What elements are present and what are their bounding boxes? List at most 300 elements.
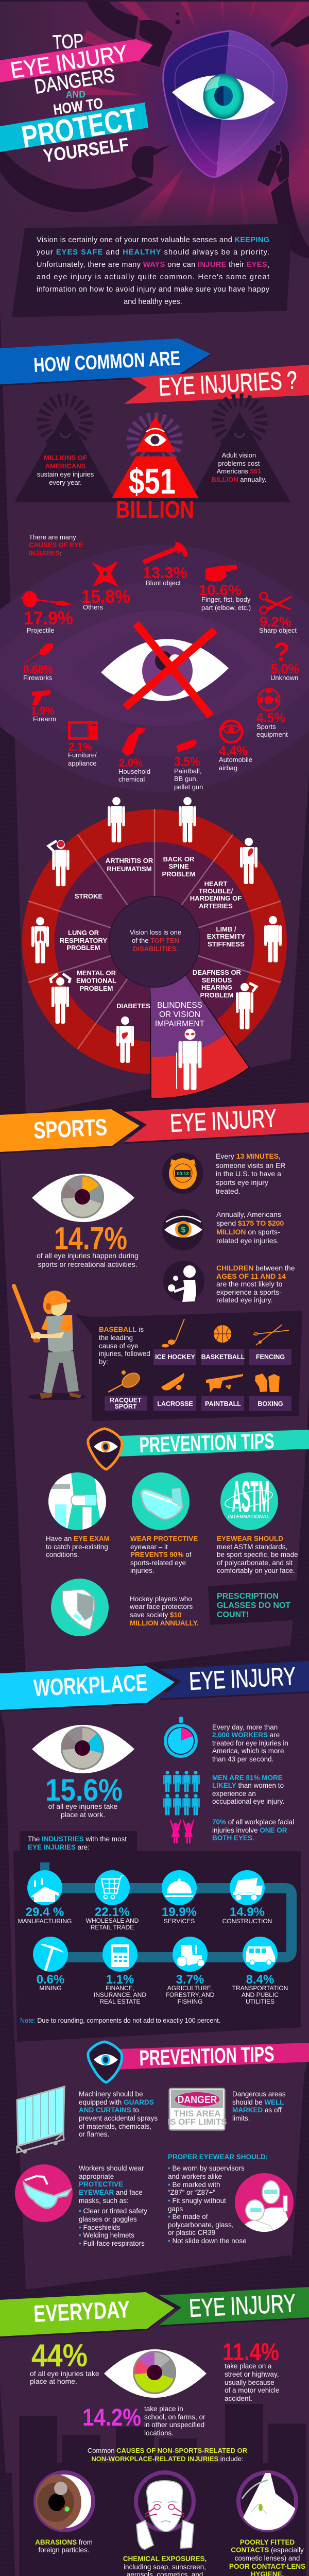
- text: adult vision: problems cost: [218, 460, 260, 467]
- icon: safety glasses: [15, 2164, 73, 2222]
- card: paintball: PAINTBALL: [205, 1400, 241, 1408]
- text: children: AGES OF 11 AND 14: [216, 1272, 286, 1280]
- panel: intro: Unfortunately, there are many WAYS one can INJURE their EYES,: [37, 261, 269, 269]
- stat: manufacturing: MANUFACTURING: [18, 1918, 72, 1925]
- icon: boy catching ball: [163, 1261, 204, 1302]
- icon: workplace eye pie: [32, 1725, 134, 1773]
- graphic: concentric eye bands: [0, 545, 309, 792]
- text: causes intro: There are many: [29, 533, 76, 541]
- text: baseball: the leading: [99, 1334, 133, 1342]
- stat: mining: [33, 1937, 68, 1992]
- heading: workplace eye injury: [0, 1661, 309, 1711]
- stat: paintball gun: pellet gun: [174, 783, 203, 791]
- text: proper eyewear list: • Not slide down the nose: [168, 2237, 247, 2245]
- stat: 11.4 percent: [222, 2338, 280, 2402]
- stat: 14.2 percent: school, on farms, or: [144, 2413, 205, 2421]
- panel: hero background: [0, 2, 309, 227]
- stat: furniture appliance: [68, 721, 98, 767]
- labels: sectors: EMOTIONAL: [76, 977, 116, 985]
- card: racquet sport: [105, 1370, 147, 1411]
- text: adult vision: Adult vision: [222, 451, 256, 459]
- heading: proper eyewear: PROPER EYEWEAR SHOULD:: [168, 2153, 268, 2161]
- stat: unknown: 5.0%: [271, 661, 299, 676]
- stat: sports equipment: [256, 689, 288, 738]
- stat: agriculture: [166, 1937, 215, 2005]
- stat: 11.4 percent: usually because: [225, 2379, 274, 2386]
- text: proper eyewear list: • Be worn by supervisors: [168, 2164, 245, 2172]
- stat: fireworks: [23, 641, 55, 682]
- text: baseball: by:: [99, 1358, 108, 1366]
- stat: agriculture: AGRICULTURE,: [167, 1985, 213, 1992]
- panel: intro: information on how to avoid injury and make sure you have happy: [37, 285, 270, 294]
- text: proper eyewear list: gaps: [168, 2205, 183, 2213]
- stat: 15.6 percent: of all eye injuries take: [48, 1802, 118, 1810]
- heading: sports eye injury: [0, 1103, 309, 1154]
- stat: 11.4 percent: of a motor vehicle: [225, 2386, 280, 2394]
- stat: finance: 1.1%: [106, 1973, 134, 1987]
- stat: 44 percent: [30, 2338, 99, 2385]
- text: 70 percent: injuries involve ONE OR: [212, 1826, 287, 1834]
- text: every day: treated for eye injuries in: [212, 1739, 288, 1747]
- text: children: CHILDREN between the: [216, 1264, 295, 1272]
- icon: ASTM logo: [220, 1472, 278, 1530]
- heading: everyday eye injury: EVERYDAY: [33, 2296, 130, 2327]
- text: adult vision: Americans $51: [217, 467, 261, 475]
- stat: mining: MINING: [39, 1985, 62, 1992]
- labels: sectors: RHEUMATISM: [107, 865, 152, 873]
- text: proper eyewear list: • Fit snugly without: [168, 2197, 226, 2205]
- card: fencing: [249, 1325, 291, 1365]
- callout: prescription glasses: COUNT!: [217, 1611, 249, 1619]
- text: machinery: AND CURTAINS to: [79, 2106, 139, 2114]
- text: common causes: Common CAUSES OF NON-SPORTS-RELATED OR: [88, 2447, 247, 2454]
- stat: construction: CONSTRUCTION: [222, 1918, 272, 1925]
- icon: hockey helmet: [51, 1579, 109, 1636]
- text: dangerous areas: MARKED as off: [232, 2106, 282, 2114]
- stat: projectile: [21, 591, 73, 634]
- title: EYE INJURY: [9, 40, 129, 83]
- text: baseball: cause of eye: [99, 1342, 139, 1350]
- labels: sectors: PROBLEM: [67, 944, 100, 952]
- text: eye exam: to catch pre-existing: [46, 1543, 108, 1551]
- labels: sectors: BLINDNESS: [157, 1001, 202, 1010]
- icon: money eye: $: [181, 1226, 186, 1234]
- hand: bottom-right spray can: [257, 140, 309, 259]
- icon: clock: [164, 1717, 198, 1758]
- text: every 13 minutes: treated.: [216, 1187, 240, 1195]
- panel: intro: Vision is certainly one of your most valuable senses and KEEPING: [37, 236, 269, 244]
- note: rounding: Note: Due to rounding, components do not add to exactly 100 percent.: [20, 2017, 220, 2024]
- text: eyewear should: meet ASTM standards,: [217, 1543, 287, 1551]
- text: workers should wear: PROTECTIVE: [79, 2180, 123, 2188]
- heading: workplace eye injury: WORKPLACE: [33, 1669, 148, 1701]
- text: eyewear should: be sport specific, be made: [217, 1551, 298, 1558]
- labels: sectors: PROBLEM: [200, 991, 234, 999]
- text: workers should wear: • Full-face respirators: [79, 2240, 145, 2247]
- text: dangerous areas: limits.: [232, 2114, 250, 2122]
- text: children: experience a sports-: [216, 1288, 282, 1296]
- text: baseball: BASEBALL is: [99, 1326, 144, 1333]
- labels: sectors: STIFFNESS: [208, 940, 245, 948]
- text: every 13 minutes: in the U.S. to have a: [216, 1170, 281, 1178]
- stat: 15.6 percent: place at work.: [61, 1810, 105, 1819]
- stat: transportation: UTILITIES: [246, 1998, 274, 2005]
- stat: 51 billion pyramid: $51: [129, 461, 176, 501]
- heading: sports prevention tips: [88, 1429, 309, 1469]
- stat: firearm: 1.9%: [31, 704, 55, 717]
- panel: intro: your EYES SAFE and HEALTHY should always be a priority.: [37, 248, 269, 257]
- stat: finger, fist: Finger, fist, body: [201, 596, 251, 603]
- text: 70 percent: 70% of all workplace facial: [212, 1818, 294, 1826]
- labels: sectors: DEAFNESS OR: [193, 969, 242, 976]
- stat: automobile airbag: airbag: [219, 764, 237, 772]
- labels: sectors: ARTHRITIS OR: [106, 857, 153, 865]
- text: workers should wear: masks, such as:: [79, 2197, 129, 2205]
- stat: automobile airbag: [219, 721, 252, 772]
- icon: shield with eye: [163, 31, 287, 177]
- panel: sports background: [0, 1123, 309, 1678]
- card: lacrosse: [153, 1373, 196, 1411]
- panel: everyday background: [0, 2303, 309, 2576]
- stat: agriculture: FORESTRY, AND: [166, 1991, 215, 1998]
- wedge: blindness highlight: [150, 975, 249, 1098]
- text: annually americans: spend $175 TO $200: [216, 1219, 284, 1227]
- text: poorly fitted: POOR CONTACT-LENS: [229, 2563, 305, 2570]
- text: wear protective: sports-related eye: [130, 1559, 186, 1567]
- panel: workplace background: [0, 1685, 309, 2290]
- labels: sectors: LUNG OR: [68, 929, 99, 937]
- card: racquet sport: SPORT: [114, 1403, 137, 1410]
- stat: wholesale: 22.1%: [95, 1905, 130, 1919]
- card: boxing: [249, 1374, 291, 1411]
- title: PROTECT: [19, 101, 139, 155]
- stat: sports equipment: 4.5%: [256, 710, 285, 725]
- stat: automobile airbag: 4.4%: [219, 743, 248, 758]
- text: poorly fitted: cosmetic lenses) and: [235, 2554, 300, 2562]
- stat: manufacturing: [18, 1870, 72, 1925]
- labels: sectors: ARTERIES: [199, 902, 233, 910]
- text: machinery: prevent accidental sprays: [79, 2114, 158, 2122]
- stat: furniture appliance: 2.1%: [68, 740, 92, 753]
- text: eye exam: Have an EYE EXAM: [46, 1535, 110, 1543]
- text: hockey players: wear face protectors: [129, 1603, 193, 1611]
- icon: sports eye pie: [32, 1174, 134, 1222]
- stat: others: 15.8%: [81, 587, 130, 607]
- text: proper eyewear list: or plastic CR39: [168, 2229, 215, 2236]
- stat: others: Others: [83, 603, 104, 611]
- text: eye exam: conditions.: [46, 1551, 79, 1558]
- stat: manufacturing: 29.4 %: [26, 1905, 64, 1919]
- stat: transportation: 8.4%: [246, 1973, 274, 1987]
- panel: intro: [12, 224, 292, 317]
- graphic: city skyline: [19, 2404, 306, 2576]
- stat: paintball gun: Paintball,: [174, 767, 201, 775]
- text: every day: Every day, more than: [212, 1723, 278, 1731]
- labels: sectors: [60, 855, 246, 1028]
- stat: finger, fist: part (elbow, etc.): [201, 604, 251, 612]
- stat: household chemical: chemical: [118, 775, 145, 783]
- stat: household chemical: Household: [118, 768, 150, 775]
- icon: danger sign: IS OFF LIMITS: [167, 2117, 227, 2127]
- stat: finance: REAL ESTATE: [99, 1998, 141, 2005]
- stat: 44 percent: place at home.: [30, 2377, 77, 2385]
- panel: how common background: [0, 227, 309, 1115]
- labels: sectors: HARDENING OF: [190, 894, 242, 902]
- icon: eye exam: [48, 1472, 106, 1531]
- stat: finance: FINANCE,: [106, 1985, 134, 1992]
- stat: services: 19.9%: [162, 1905, 197, 1919]
- stat: paintball gun: 3.5%: [174, 755, 200, 769]
- stat: construction: 14.9%: [230, 1905, 265, 1919]
- card: basketball: BASKETBALL: [201, 1353, 245, 1361]
- text: every day: 2,000 WORKERS are: [212, 1731, 280, 1739]
- stat: unknown: Unknown: [270, 674, 298, 682]
- stat: 14.2 percent: [82, 2403, 205, 2437]
- text: eyewear should: of polycarbonate, and sit: [217, 1559, 293, 1567]
- icon: contact lens eye: [238, 2472, 296, 2532]
- text: dangerous areas: should be WELL: [232, 2098, 284, 2106]
- text: abrasions: ABRASIONS from: [35, 2538, 93, 2546]
- text: millions of americans: every year.: [49, 479, 82, 486]
- stat: finger, fist: 10.6%: [199, 582, 242, 599]
- callout: prescription glasses: PRESCRIPTION: [217, 1592, 279, 1601]
- icon: women pictogram: [170, 1819, 194, 1843]
- callout: prescription glasses: GLASSES DO NOT: [217, 1601, 290, 1610]
- heading: how common are eye injuries: HOW COMMON ARE: [33, 347, 181, 377]
- text: workers should wear: Workers should wear: [79, 2164, 144, 2172]
- stat: sharp object: Sharp object: [259, 626, 297, 634]
- labels: sectors: STROKE: [75, 892, 102, 900]
- stat: services: SERVICES: [164, 1918, 195, 1925]
- labels: sectors: PROBLEM: [162, 870, 196, 878]
- card: lacrosse: LACROSSE: [157, 1400, 193, 1408]
- icon: danger sign: DANGER: [177, 2094, 217, 2106]
- title: [0, 30, 153, 166]
- text: 70 percent: BOTH EYES.: [212, 1834, 254, 1842]
- stat: 15.6 percent: 15.6%: [45, 1773, 123, 1807]
- stat: firearm: [31, 690, 56, 723]
- text: hockey players: Hockey players who: [130, 1595, 192, 1603]
- title: HOW TO: [53, 95, 104, 118]
- stat: furniture appliance: appliance: [68, 759, 97, 767]
- icon: safety curtain: [17, 2087, 64, 2154]
- stat: wholesale: RETAIL TRADE: [91, 1924, 134, 1931]
- stat: 14.7 percent: [37, 1221, 139, 1268]
- labels: sectors: DIABETES: [116, 1002, 150, 1010]
- stat: others: [81, 561, 130, 611]
- text: poorly fitted: CONTACTS (especially: [231, 2546, 304, 2554]
- text: workers should wear: EYEWEAR and face: [79, 2189, 143, 2196]
- stat: services: [162, 1870, 197, 1925]
- stat: unknown: [270, 637, 299, 682]
- stat: 14.2 percent: in other unspecified: [144, 2421, 204, 2429]
- text: proper eyewear list: • Be marked with: [168, 2181, 220, 2189]
- stat: mining: 0.6%: [37, 1973, 64, 1987]
- card: ice hockey: [153, 1319, 196, 1365]
- callout: prescription glasses: [208, 1580, 309, 1625]
- hand: bottom-left arm with pen: [0, 145, 171, 212]
- stat: 15.6 percent: [45, 1773, 123, 1819]
- stat: blunt object: 13.3%: [143, 564, 187, 582]
- figure: baseball player: [14, 1286, 86, 1400]
- text: machinery: equipped with GUARDS: [79, 2098, 154, 2106]
- labels: sectors: HEARING: [201, 984, 232, 991]
- stat: finance: [94, 1937, 146, 2005]
- text: men 81 percent: occupational eye injury.: [212, 1798, 284, 1805]
- text: abrasions: foreign particles.: [38, 2546, 90, 2554]
- text: proper eyewear list: • Be made of: [168, 2213, 208, 2221]
- text: every day: than 43 per second.: [212, 1755, 273, 1763]
- text: millions of americans: AMERICANS: [45, 462, 86, 470]
- panel: sports list: [75, 1311, 302, 1421]
- banner: pink ribbon: [0, 39, 153, 82]
- text: annually americans: Annually, Americans: [216, 1210, 281, 1218]
- text: annually americans: related eye injuries.: [216, 1236, 279, 1245]
- labels: sectors: SPINE: [168, 862, 189, 870]
- stat: transportation: AND PUBLIC: [242, 1991, 279, 1998]
- stat: construction: [222, 1870, 272, 1925]
- icon: abrasion eye: [30, 2472, 93, 2530]
- stat: fireworks: Fireworks: [23, 674, 53, 682]
- heading: everyday eye injury: [0, 2287, 309, 2338]
- labels: sectors: SERIOUS: [202, 976, 232, 984]
- text: centre: of the TOP TEN: [132, 937, 179, 944]
- labels: sectors: OR VISION: [159, 1010, 200, 1019]
- icon: money eye: [162, 1209, 203, 1250]
- card: fencing: FENCING: [256, 1353, 285, 1361]
- text: men 81 percent: LIKELY than women to: [212, 1782, 284, 1789]
- stat: 14.2 percent: 14.2%: [82, 2403, 141, 2431]
- stat: paintball gun: BB gun,: [174, 775, 198, 783]
- text: hockey players: MILLION ANNUALLY.: [130, 1619, 199, 1627]
- card: ice hockey: ICE HOCKEY: [155, 1353, 196, 1361]
- stat: sports equipment: Sports: [256, 723, 276, 731]
- icon: danger sign: THIS AREA: [174, 2109, 220, 2119]
- hand: top-left arm holding phone: [87, 2, 180, 67]
- text: centre: DISABILITIES.: [133, 945, 178, 953]
- text: poorly fitted: POORLY FITTED: [240, 2538, 295, 2546]
- text: industries heading: The INDUSTRIES with the most: [28, 1835, 127, 1843]
- text: dangerous areas: Dangerous areas: [232, 2090, 286, 2098]
- stat: paintball gun: [174, 740, 203, 791]
- text: proper eyewear list: and workers alike: [168, 2173, 222, 2180]
- text: eyewear should: comfortably on your face.: [217, 1567, 295, 1574]
- text: every 13 minutes: sports eye injury: [216, 1178, 268, 1187]
- text: wear protective: injuries.: [130, 1567, 154, 1574]
- stat: 14.7 percent: sports or recreational activities.: [38, 1260, 137, 1268]
- labels: sectors: RESPIRATORY: [60, 937, 107, 944]
- text: machinery: or flames.: [79, 2130, 109, 2138]
- title: TOP: [52, 30, 84, 54]
- stat: agriculture: 3.7%: [176, 1973, 204, 1987]
- stat: agriculture: FISHING: [178, 1998, 202, 2005]
- icon: men pictogram: [163, 1771, 200, 1815]
- stat: 14.7 percent: 14.7%: [54, 1221, 127, 1257]
- icon: danger sign: [167, 2089, 227, 2130]
- stat: 14.7 percent: of all eye injuries happen during: [37, 1251, 139, 1260]
- text: eyewear should: EYEWEAR SHOULD: [217, 1535, 283, 1543]
- icon: stopwatch: [162, 1153, 203, 1194]
- title: DANGERS: [33, 64, 116, 98]
- labels: sectors: BACK OR: [163, 855, 195, 863]
- chart: top ten disabilities wheel: [22, 797, 287, 1098]
- stat: finger, fist: [199, 565, 251, 612]
- card: basketball: [201, 1325, 245, 1365]
- card: paintball: [201, 1374, 244, 1411]
- graphic: pyramids band: [14, 400, 290, 502]
- stat: fireworks: 0.68%: [23, 663, 53, 676]
- text: causes intro: INJURIES:: [29, 549, 62, 557]
- text: chemical exposures: including soap, sunscreen,: [124, 2563, 206, 2571]
- stat: 51 billion pyramid: BILLION: [116, 496, 194, 523]
- text: men 81 percent: experience an: [212, 1790, 256, 1798]
- stat: furniture appliance: Furniture/: [68, 751, 97, 759]
- banner: cyan ribbon: [0, 103, 148, 152]
- text: every 13 minutes: Every 13 MINUTES,: [216, 1152, 281, 1160]
- panel: intro: and healthy eyes.: [124, 298, 182, 306]
- text: machinery: Machinery should be: [79, 2090, 143, 2098]
- labels: sectors: LIMB /: [216, 925, 236, 933]
- text: proper eyewear list: “Z87” or “Z87+”: [168, 2189, 215, 2196]
- text: every 13 minutes: someone visits an ER: [216, 1161, 285, 1170]
- stat: 11.4 percent: take place on a: [225, 2362, 272, 2370]
- text: millions of americans: MILLIONS OF: [44, 454, 87, 462]
- text: children: related eye injury.: [216, 1296, 272, 1304]
- text: baseball: injuries, followed: [99, 1350, 150, 1358]
- text: children: are the most likely to: [216, 1280, 283, 1288]
- stat: 14.2 percent: locations.: [144, 2429, 174, 2437]
- labels: sectors: HEART: [204, 880, 227, 888]
- text: machinery: of materials, chemicals,: [79, 2123, 151, 2130]
- text: every day: America, which is more: [212, 1747, 284, 1755]
- icon: goggles: [132, 1472, 190, 1530]
- panel: intro: and eye injury is actually quite common. Here's some great: [37, 273, 269, 281]
- icon: everyday eye pie: [104, 2349, 207, 2398]
- text: adult vision: BILLION annually.: [212, 476, 266, 483]
- stat: household chemical: 2.0%: [119, 756, 143, 769]
- text: hockey players: save society $10: [130, 1611, 182, 1619]
- stat: sharp object: 9.2%: [260, 614, 291, 630]
- text: industries heading: EYE INJURIES are:: [28, 1843, 90, 1851]
- text: causes intro: CAUSES OF EYE: [29, 541, 83, 549]
- stat: automobile airbag: Automobile: [219, 756, 252, 764]
- text: workers should wear: glasses or goggles: [79, 2215, 137, 2223]
- stat: finance: INSURANCE, AND: [94, 1991, 146, 1998]
- text: proper eyewear list: polycarbonate, glass,: [168, 2221, 234, 2229]
- labels: sectors: EXTREMITY: [207, 933, 246, 940]
- icon: crossed-out eye: [101, 623, 229, 716]
- labels: sectors: PROBLEM: [79, 985, 113, 992]
- stat: transportation: [232, 1937, 288, 2005]
- heading: sports eye injury: SPORTS: [33, 1113, 108, 1144]
- text: men 81 percent: MEN ARE 81% MORE: [212, 1774, 283, 1782]
- stat: household chemical: [118, 727, 150, 783]
- text: centre: Vision loss is one: [130, 928, 181, 936]
- stat: sports equipment: equipment: [256, 731, 288, 738]
- title: AND: [66, 89, 85, 100]
- icon: stopwatch: 00:13: [177, 1171, 189, 1176]
- card: racquet sport: RACQUET: [110, 1397, 142, 1404]
- stat: blunt object: Blunt object: [146, 579, 181, 587]
- figures: people with conditions: [31, 797, 282, 1090]
- text: workers should wear: • Clear or tinted safety: [79, 2207, 147, 2215]
- labels: sectors: IMPAIRMENT: [155, 1020, 205, 1028]
- stat: transportation: TRANSPORTATION: [232, 1985, 288, 1992]
- text: millions of americans: sustain eye injuries: [37, 470, 94, 478]
- heading: how common are eye injuries: [0, 338, 309, 404]
- stat: wholesale: WHOLESALE AND: [86, 1917, 139, 1924]
- stat: wholesale: [86, 1870, 139, 1931]
